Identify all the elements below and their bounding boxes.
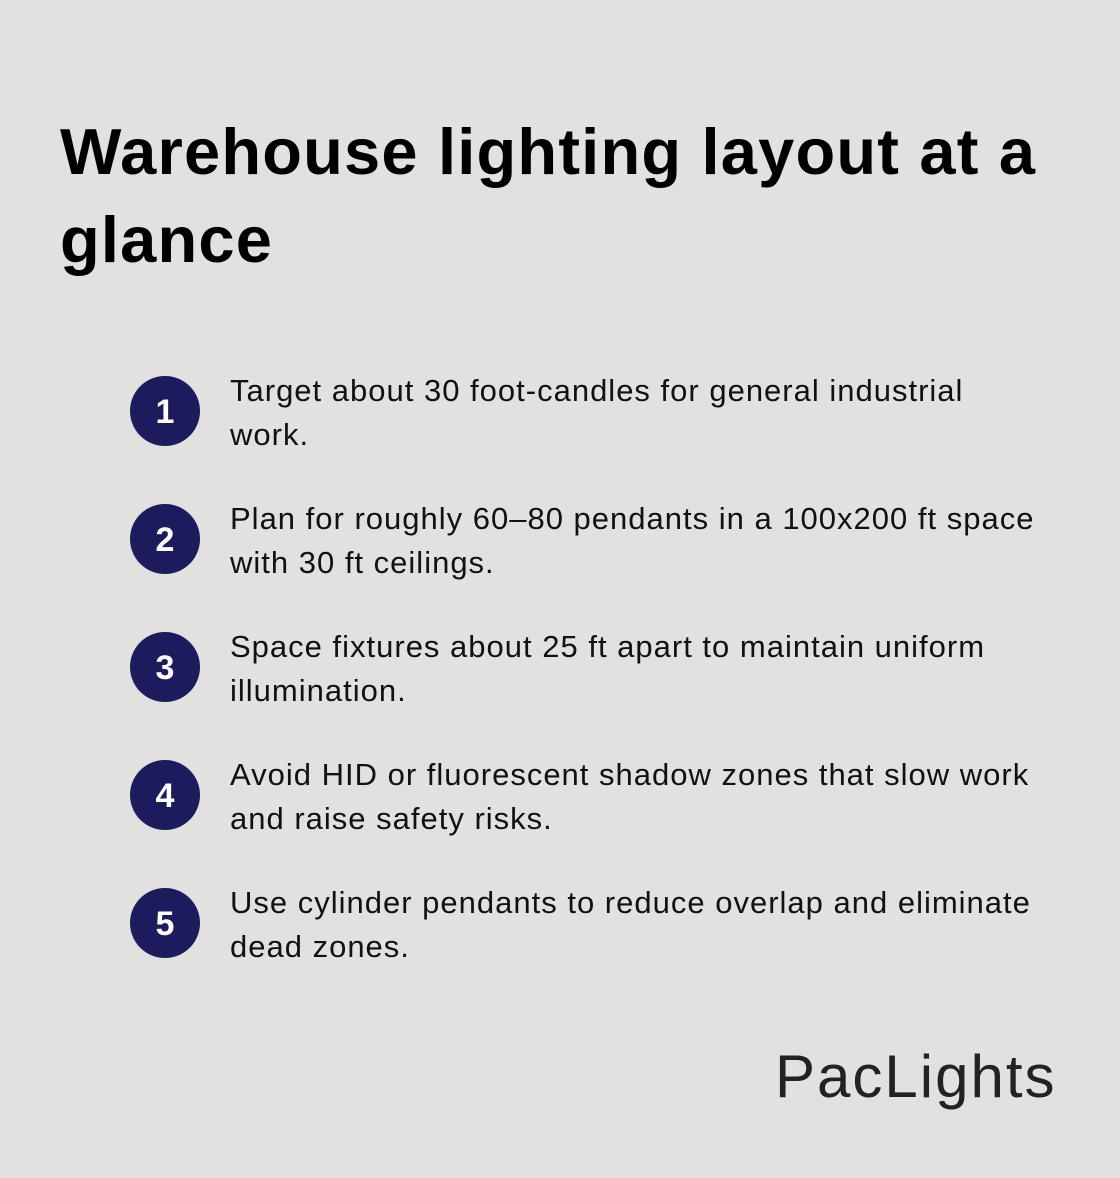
item 1: 1	[156, 393, 174, 431]
item 2: Plan for roughly 60–80 pendants in a 100x200 ft space	[230, 501, 1034, 536]
item 3	[130, 629, 985, 708]
item 2	[130, 501, 1034, 580]
item 2: 2	[156, 521, 174, 559]
item 3: 3	[156, 649, 174, 687]
item 5: dead zones.	[230, 929, 410, 964]
title: Warehouse lighting layout at a	[60, 115, 1036, 188]
item 1: work.	[230, 417, 309, 452]
item 1: Target about 30 foot-candles for general industrial	[230, 373, 963, 408]
item 5	[130, 885, 1031, 964]
logo: PacLights	[775, 1043, 1056, 1110]
item 2: with 30 ft ceilings.	[230, 545, 495, 580]
title: glance	[60, 203, 273, 276]
item 4: 4	[156, 777, 174, 815]
item 1	[130, 373, 963, 452]
item 5: 5	[156, 905, 174, 943]
item 4	[130, 757, 1029, 836]
item 4: Avoid HID or fluorescent shadow zones that slow work	[230, 757, 1029, 792]
item 5: Use cylinder pendants to reduce overlap and eliminate	[230, 885, 1031, 920]
item 4: and raise safety risks.	[230, 801, 553, 836]
item 3: Space fixtures about 25 ft apart to maintain uniform	[230, 629, 985, 664]
item 3: illumination.	[230, 673, 407, 708]
title	[60, 115, 1036, 276]
